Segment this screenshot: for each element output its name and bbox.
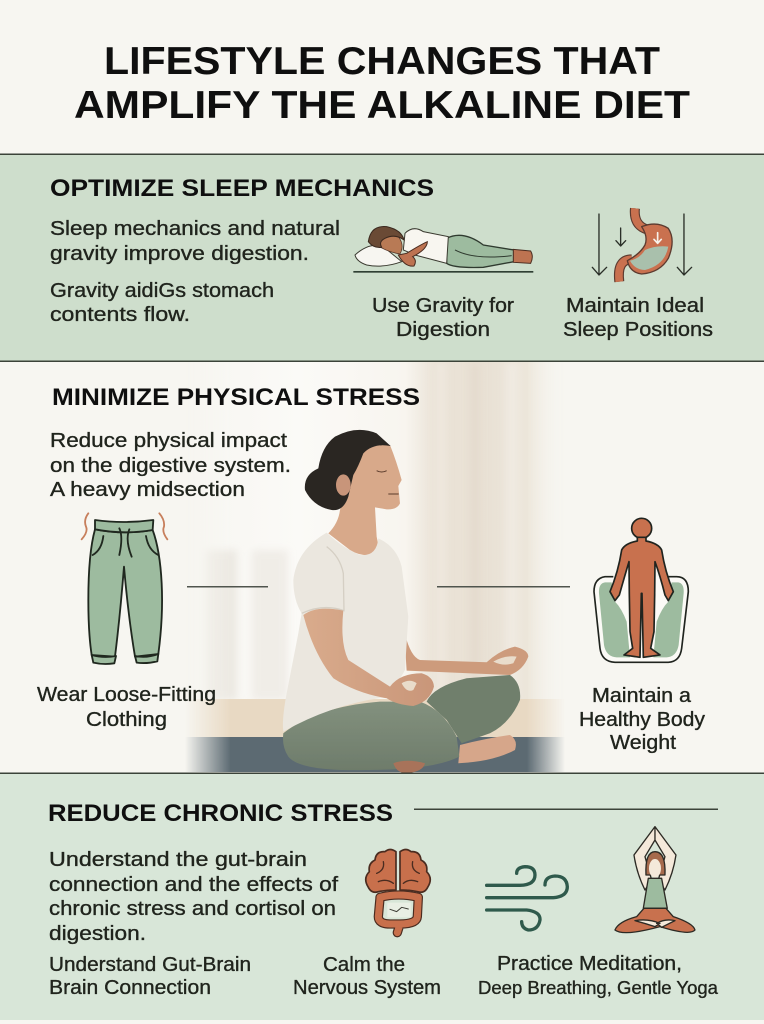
text block: sleep mechanics intro: Gravity aidiGs stomach (50, 280, 274, 302)
label: maintain a healthy body weight (579, 685, 705, 754)
icon: seated yoga pose (615, 827, 695, 933)
label: maintain a healthy body weight: Weight (610, 732, 676, 754)
panel: minimize physical stress (36, 362, 706, 772)
label: practice meditation, breathing, yoga: Deep Breathing, Gentle Yoga (478, 977, 719, 998)
label: understand gut-brain connection: Understand Gut-Brain (49, 954, 251, 976)
label: use gravity for digestion: Digestion (396, 319, 490, 341)
text block: reduce physical impact (50, 430, 291, 501)
heading: reduce chronic stress: REDUCE CHRONIC STRESS (48, 800, 393, 827)
neck and face (328, 444, 402, 555)
text block: sleep mechanics intro: Sleep mechanics and natural (50, 218, 340, 240)
icon: person sleeping on side (353, 227, 533, 273)
panel: optimize sleep mechanics (0, 154, 764, 362)
icon: body on weight scale (594, 518, 688, 662)
text block: gut-brain connection (49, 849, 338, 945)
text block: reduce physical impact: A heavy midsection (50, 479, 245, 501)
label: practice meditation, breathing, yoga (478, 953, 719, 998)
label: calm the nervous system: Nervous System (293, 977, 441, 999)
label: maintain a healthy body weight: Healthy Body (579, 709, 705, 731)
photo: woman meditating (185, 362, 565, 773)
label: calm the nervous system: Calm the (323, 954, 405, 976)
title: LIFESTYLE CHANGES THAT (104, 40, 660, 83)
label: wear loose-fitting clothing (37, 684, 216, 731)
icon: stomach with gravity arrows (592, 208, 692, 282)
label: understand gut-brain connection: Brain Connection (49, 977, 211, 999)
text block: gut-brain connection: Understand the gut-brain (49, 849, 307, 871)
icon: brain and intestines (366, 849, 430, 933)
heading rule (414, 808, 718, 810)
heading: optimize sleep mechanics: OPTIMIZE SLEEP MECHANICS (50, 175, 434, 202)
label: calm the nervous system (293, 954, 441, 999)
connector: clothing to photo (187, 586, 268, 588)
connector: photo to body weight (437, 586, 570, 588)
label: wear loose-fitting clothing: Wear Loose-Fitting (37, 684, 216, 706)
hair (305, 430, 391, 510)
text block: gut-brain connection: chronic stress and cortisol on (49, 898, 336, 920)
heading: minimize physical stress: MINIMIZE PHYSICAL STRESS (52, 384, 420, 411)
label: maintain a healthy body weight: Maintain a (592, 685, 692, 707)
title: AMPLIFY THE ALKALINE DIET (74, 84, 690, 127)
text block: reduce physical impact: on the digestive system. (50, 455, 291, 477)
icon: loose-fitting pants (82, 513, 167, 664)
label: maintain ideal sleep positions (563, 295, 713, 341)
label: practice meditation, breathing, yoga: Practice Meditation, (497, 953, 682, 975)
back arm (404, 630, 528, 675)
pants (427, 675, 520, 743)
text block: gut-brain connection: digestion. (49, 923, 146, 945)
front arm (303, 609, 434, 706)
text block: gut-brain connection: connection and the effects of (49, 874, 338, 896)
text block: sleep mechanics intro: contents flow. (50, 304, 190, 326)
shirt (283, 533, 408, 732)
label: wear loose-fitting clothing: Clothing (86, 709, 167, 731)
label: use gravity for digestion (372, 295, 514, 341)
panel: reduce chronic stress (0, 772, 764, 1020)
label: maintain ideal sleep positions: Sleep Positions (563, 319, 713, 341)
title (74, 40, 690, 127)
label: maintain ideal sleep positions: Maintain Ideal (566, 295, 704, 317)
icon: breath wind lines (487, 867, 567, 930)
label: understand gut-brain connection (49, 954, 251, 999)
text block: reduce physical impact: Reduce physical impact (50, 430, 287, 452)
label: use gravity for digestion: Use Gravity for (372, 295, 514, 317)
text block: sleep mechanics intro (50, 218, 340, 326)
text block: sleep mechanics intro: gravity improve digestion. (50, 243, 309, 265)
